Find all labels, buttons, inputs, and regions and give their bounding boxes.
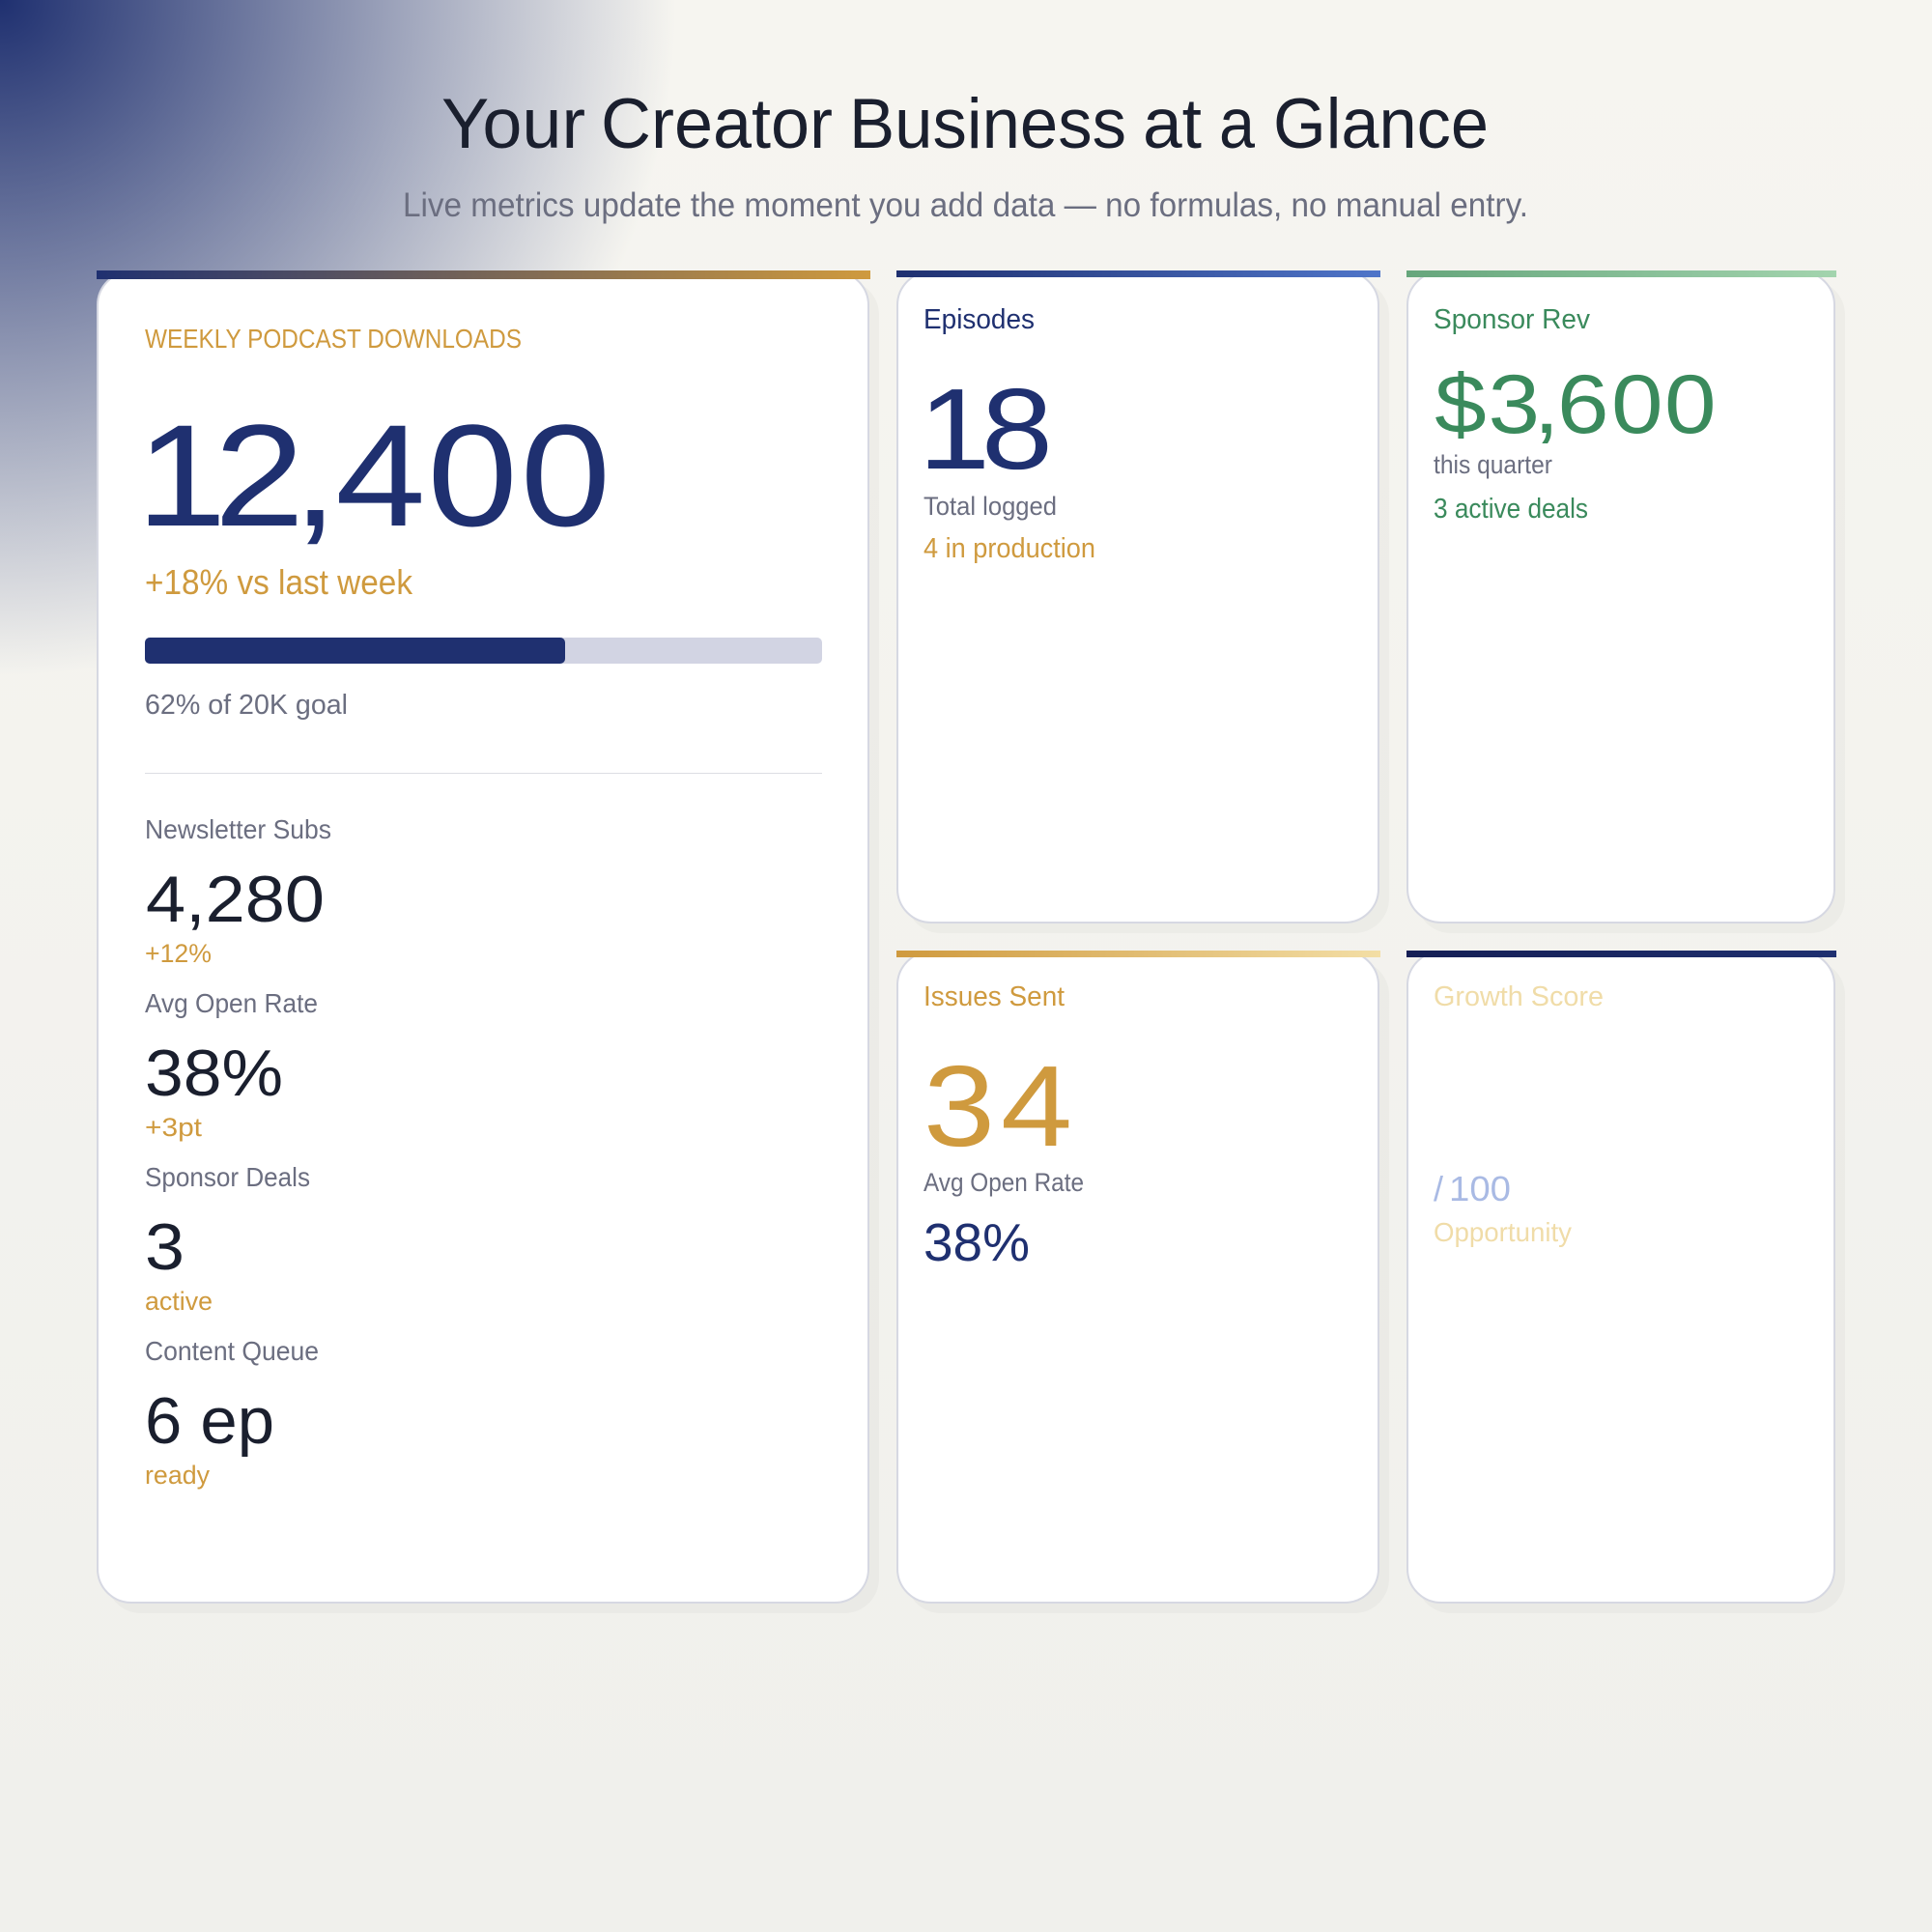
metric: avg open rate: Avg Open Rate <box>145 988 318 1018</box>
panel: sponsor revenue: Sponsor Rev <box>1434 304 1590 335</box>
subtitle: Live metrics update the moment you add data — no formulas, no manual entry. <box>403 186 1528 224</box>
panel: growth score: Opportunity <box>1434 1217 1572 1247</box>
panel: sponsor revenue: $3,600 <box>1435 358 1717 451</box>
panel label: WEEKLY PODCAST DOWNLOADS <box>145 324 522 354</box>
metric: sponsor deals: 3 <box>145 1210 185 1284</box>
title: Your <box>441 85 585 163</box>
panel: sponsor revenue: this quarter <box>1434 450 1552 479</box>
title: at <box>1143 85 1202 163</box>
progress bar <box>145 638 822 664</box>
panel: issues sent: 38% <box>923 1212 1030 1272</box>
metric: sponsor deals: Sponsor Deals <box>145 1162 310 1192</box>
panel: weekly podcast downloads <box>97 270 879 1613</box>
metric: content queue: 6 ep <box>145 1384 274 1458</box>
title: Business <box>849 85 1126 163</box>
panel: growth score: Growth Score <box>1434 981 1604 1012</box>
big number: 12,400 <box>136 394 611 556</box>
title: a <box>1219 85 1255 163</box>
metric: newsletter subs: Newsletter Subs <box>145 814 331 844</box>
panel: episodes <box>896 270 1389 933</box>
panel: issues sent: Issues Sent <box>923 981 1065 1012</box>
metric: content queue: ready <box>145 1461 210 1490</box>
panel: issues sent <box>896 951 1389 1613</box>
metric: avg open rate: 38% <box>145 1037 283 1110</box>
metric: content queue: Content Queue <box>145 1336 319 1366</box>
panel: episodes: 18 <box>919 365 1053 493</box>
metric: content queue <box>145 1336 319 1490</box>
metric: sponsor deals: active <box>145 1287 213 1316</box>
metric: avg open rate <box>145 988 318 1142</box>
panel: issues sent: 34 <box>923 1042 1072 1170</box>
panel: episodes: Total logged <box>923 492 1057 521</box>
metric: avg open rate: +3pt <box>145 1113 203 1142</box>
corner gradient glow <box>0 0 696 696</box>
panel: growth score: / <box>1434 1169 1443 1208</box>
metric: sponsor deals <box>145 1162 310 1316</box>
panel: growth score <box>1406 951 1845 1613</box>
metric: newsletter subs <box>145 814 331 968</box>
title: Glance <box>1273 85 1489 163</box>
metric: newsletter subs: +12% <box>145 939 212 968</box>
trend: +18% vs last week <box>145 562 413 602</box>
metric: newsletter subs: 4,280 <box>146 863 325 936</box>
panel: sponsor revenue <box>1406 270 1845 933</box>
panel: issues sent: Avg Open Rate <box>923 1168 1084 1197</box>
panel: episodes: Episodes <box>923 304 1035 335</box>
panel: growth score: 100 <box>1449 1169 1511 1208</box>
panel: episodes: 4 in production <box>923 533 1095 564</box>
panel: sponsor revenue: 3 active deals <box>1434 494 1588 525</box>
progress caption: 62% of 20K goal <box>145 690 348 721</box>
title: Creator <box>601 85 833 163</box>
